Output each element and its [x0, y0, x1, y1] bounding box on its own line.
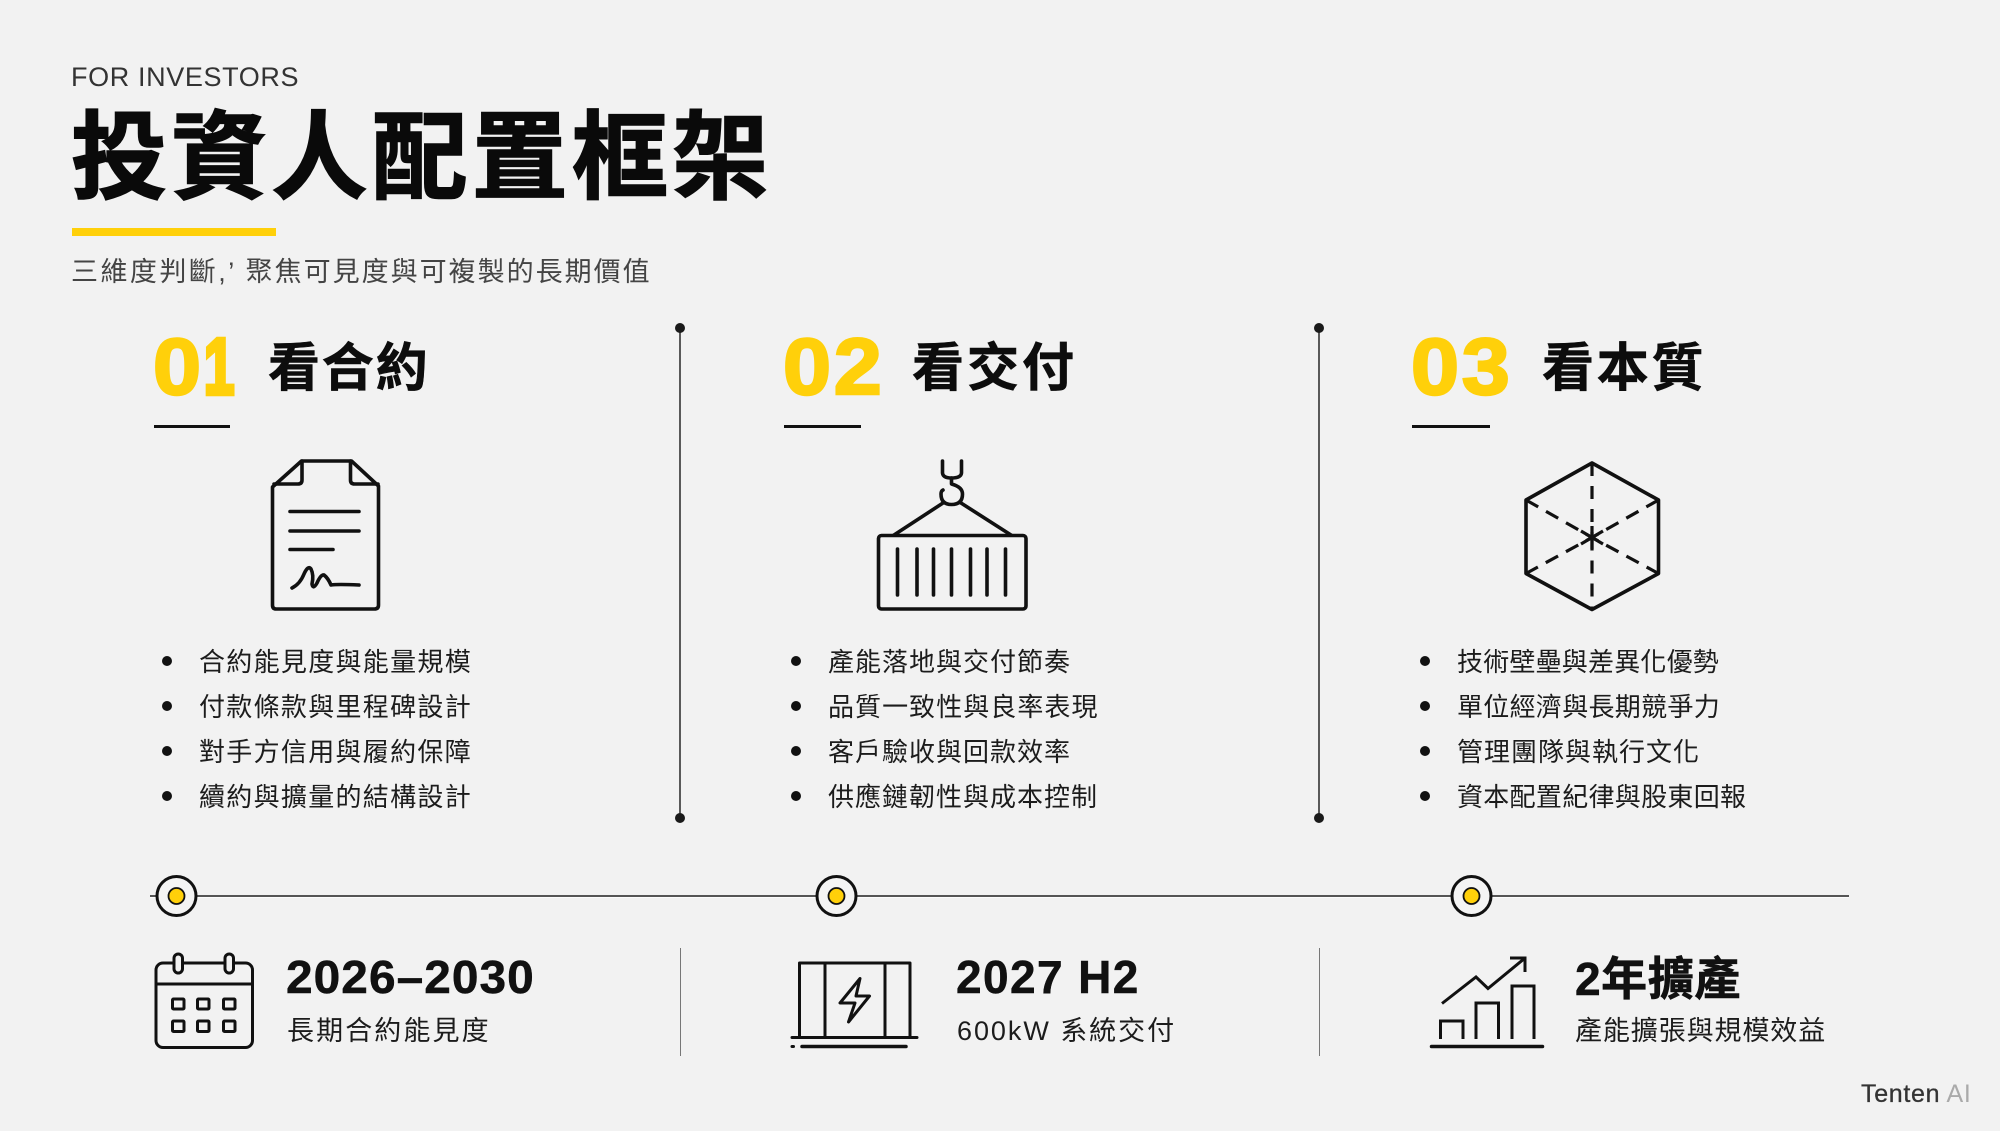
- heading 看交付: 看交付: [912, 340, 1077, 398]
- bullet list: [791, 647, 1099, 812]
- figure: 2026–2030: [286, 951, 535, 1003]
- caption: 長期合約能見度: [287, 1016, 491, 1046]
- milestone: 2年擴產: [1430, 953, 1826, 1048]
- heading rule: [154, 425, 230, 428]
- number 01: [153, 322, 236, 411]
- eyebrow: FOR INVESTORS: FOR INVESTORS: [71, 62, 299, 92]
- bullet list: [1420, 647, 1746, 812]
- item: 資本配置紀律與股東回報: [1457, 782, 1746, 812]
- footer brand: Tenten AI: [1861, 1080, 1972, 1108]
- panel: column 2 看交付: [783, 322, 1099, 812]
- item: 合約能見度與能量規模: [199, 647, 472, 677]
- item: 付款條款與里程碑設計: [199, 692, 472, 722]
- caption: 600kW 系統交付: [957, 1016, 1176, 1046]
- heading 看合約: 看合約: [268, 340, 429, 398]
- milestone: 2026–2030: [154, 951, 535, 1049]
- item: 單位經濟與長期競爭力: [1457, 692, 1720, 722]
- heading 看本質: 看本質: [1542, 340, 1706, 398]
- title accent bar: [72, 228, 276, 236]
- caption: 產能擴張與規模效益: [1575, 1016, 1826, 1046]
- title: 投資人配置框架: [71, 105, 772, 212]
- number 03: 03: [1411, 322, 1513, 411]
- bullet list: [162, 647, 472, 812]
- milestone divider 2: [1318, 948, 1320, 1056]
- item: 續約與擴量的結構設計: [199, 782, 472, 812]
- divider: column 1/2: [675, 323, 685, 823]
- number 02: 02: [783, 322, 885, 411]
- divider: column 2/3: [1314, 323, 1324, 823]
- panel: column 1 看合約: [153, 322, 472, 812]
- item: 對手方信用與履約保障: [199, 737, 472, 767]
- item: 產能落地與交付節奏: [828, 647, 1071, 677]
- heading rule: [784, 425, 861, 428]
- number 01: 1: [204, 322, 236, 411]
- item: 品質一致性與良率表現: [828, 692, 1099, 722]
- milestone divider 1: [680, 948, 681, 1056]
- item: 管理團隊與執行文化: [1457, 737, 1700, 767]
- heading rule: [1412, 425, 1490, 428]
- item: 供應鏈韌性與成本控制: [828, 782, 1098, 812]
- timeline with three nodes: [150, 875, 1849, 917]
- subtitle: 三維度判斷,’ 聚焦可見度與可複製的長期價值: [71, 257, 652, 287]
- item: 客戶驗收與回款效率: [828, 737, 1071, 767]
- item: 技術壁壘與差異化優勢: [1457, 647, 1719, 677]
- number 01: 0: [153, 322, 204, 411]
- milestone: 2027 H2: [790, 951, 1176, 1048]
- figure: 2027 H2: [956, 951, 1140, 1003]
- figure: 2年擴產: [1575, 953, 1741, 1005]
- panel: column 3 看本質: [1411, 322, 1746, 812]
